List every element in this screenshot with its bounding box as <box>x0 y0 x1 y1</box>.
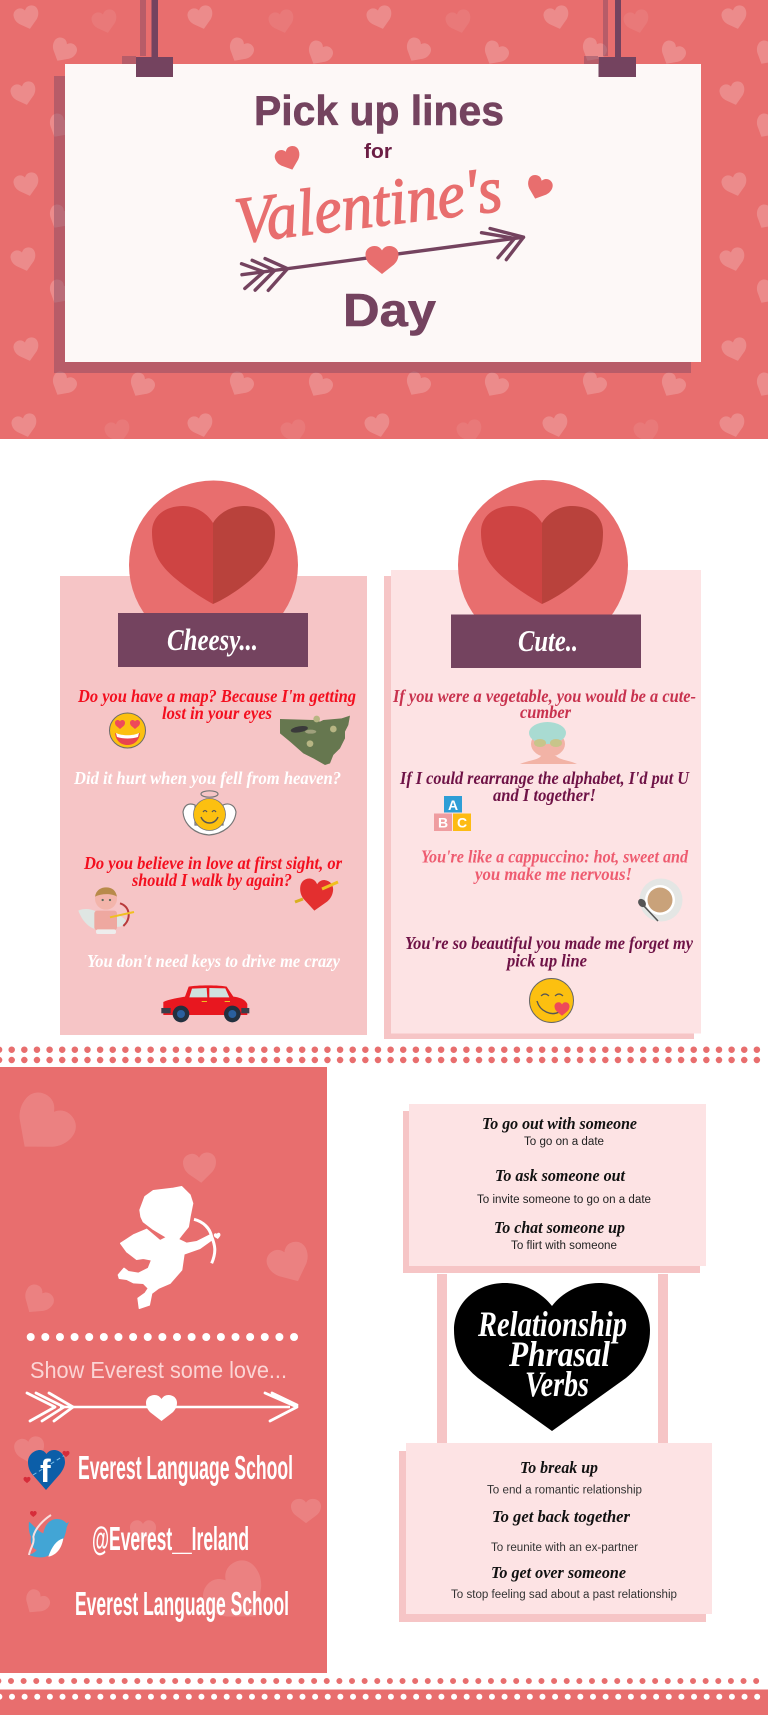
verb: break up: To break up <box>520 1458 598 1477</box>
sign shadow with hanging straps <box>54 0 691 373</box>
arrow through heart <box>240 224 526 295</box>
definition: To flirt with someone <box>511 1240 617 1252</box>
banner: cute: Cute.. <box>518 623 578 658</box>
arrow with heart <box>27 1393 297 1421</box>
dotted rule <box>31 1333 296 1341</box>
title: for: for <box>364 141 392 163</box>
text: facebook name: Everest Language School <box>78 1449 293 1486</box>
panel: show some love <box>0 1067 327 1673</box>
banner: cute <box>451 614 641 668</box>
icon: circle with heart <box>458 480 628 650</box>
icon: cupid <box>78 887 134 934</box>
icon: cupid silhouette <box>118 1187 221 1308</box>
heading: show everest some love: Show Everest some love... <box>30 1357 287 1383</box>
icon: twitter bird with bow <box>29 1511 69 1557</box>
line: keys: You don't need keys to drive me crazy <box>87 951 341 971</box>
line: vegetable: If you were a vegetable, you would be a cute- <box>392 686 696 706</box>
icon: angel emoji <box>183 791 236 835</box>
icon: coffee cup <box>636 878 682 922</box>
panel: phrasal verbs top <box>403 1104 706 1273</box>
definition: To go on a date <box>524 1136 604 1148</box>
line: forget: pick up line <box>505 950 587 970</box>
icon: ABC blocks: A <box>448 797 458 813</box>
text: school name: Everest Language School <box>75 1585 289 1622</box>
icon: woman with cucumber mask <box>520 722 577 764</box>
icon: facebook heart: f <box>40 1453 51 1489</box>
title: Day: Day <box>343 284 436 336</box>
bottom band <box>0 1681 768 1715</box>
icon: kissing emoji <box>530 978 574 1022</box>
posts of sign <box>437 1274 668 1443</box>
icon: ABC blocks: C <box>457 814 467 830</box>
verb: go out with: To go out with someone <box>482 1114 637 1133</box>
black heart with title <box>454 1283 650 1431</box>
line: vegetable: cumber <box>520 702 572 722</box>
line: cappuccino: You're like a cappuccino: hot, sweet and <box>421 846 689 866</box>
hanging sign <box>65 64 701 362</box>
verb: get over: To get over someone <box>491 1563 626 1582</box>
line: map: lost in your eyes <box>162 703 272 723</box>
icon: small heart right <box>523 173 555 203</box>
faint hearts <box>2 1086 321 1636</box>
line: cappuccino: you make me nervous! <box>473 864 632 884</box>
definition: To reunite with an ex-partner <box>491 1542 638 1554</box>
line: map: Do you have a map? Because I'm getting <box>77 686 356 706</box>
definition: To end a romantic relationship <box>487 1484 642 1496</box>
panel: cute <box>384 480 701 1039</box>
definition: To stop feeling sad about a past relationship <box>451 1589 677 1601</box>
line: love at first sight: Do you believe in love at first sight, or <box>83 853 343 873</box>
header heart pattern <box>9 4 768 440</box>
panel: phrasal verbs bottom <box>399 1443 712 1622</box>
banner: cheesy: Cheesy... <box>167 622 258 657</box>
header background panel <box>0 0 768 439</box>
title: Valentine's: Valentine's <box>231 153 506 258</box>
line: alphabet: and I together! <box>493 785 596 805</box>
line: heaven: Did it hurt when you fell from heaven? <box>73 768 341 788</box>
icon: heart with arrow <box>295 878 338 912</box>
verb: ask out: To ask someone out <box>495 1166 626 1185</box>
line: alphabet: If I could rearrange the alphabet, I'd put U <box>399 768 690 788</box>
icon: small heart left <box>273 144 304 174</box>
faint header hearts <box>90 8 662 446</box>
icon: map <box>280 716 350 765</box>
icon: ABC blocks: B <box>438 814 448 830</box>
panel: cheesy <box>60 480 367 1035</box>
text: twitter handle: @Everest__Ireland <box>92 1520 249 1557</box>
definition: To invite someone to go on a date <box>477 1194 651 1206</box>
black heart with title: Relationship <box>477 1304 627 1344</box>
line: love at first sight: should I walk by again? <box>131 870 292 890</box>
black heart with title: Phrasal <box>508 1334 610 1374</box>
icon: ABC blocks <box>434 796 471 831</box>
sign hangers <box>136 0 636 77</box>
verb: chat up: To chat someone up <box>494 1218 625 1237</box>
icon: circle with heart <box>129 480 298 650</box>
verb: get back together: To get back together <box>492 1507 630 1526</box>
title: Pick up lines: Pick up lines <box>254 87 504 134</box>
icon: red car <box>161 985 249 1022</box>
banner: cheesy <box>118 613 308 667</box>
line: forget: You're so beautiful you made me forget my <box>405 933 694 953</box>
icon: facebook heart <box>24 1450 70 1490</box>
dotted divider <box>0 1050 768 1060</box>
black heart with title: Verbs <box>525 1364 589 1404</box>
icon: heart eyes emoji <box>110 713 146 748</box>
